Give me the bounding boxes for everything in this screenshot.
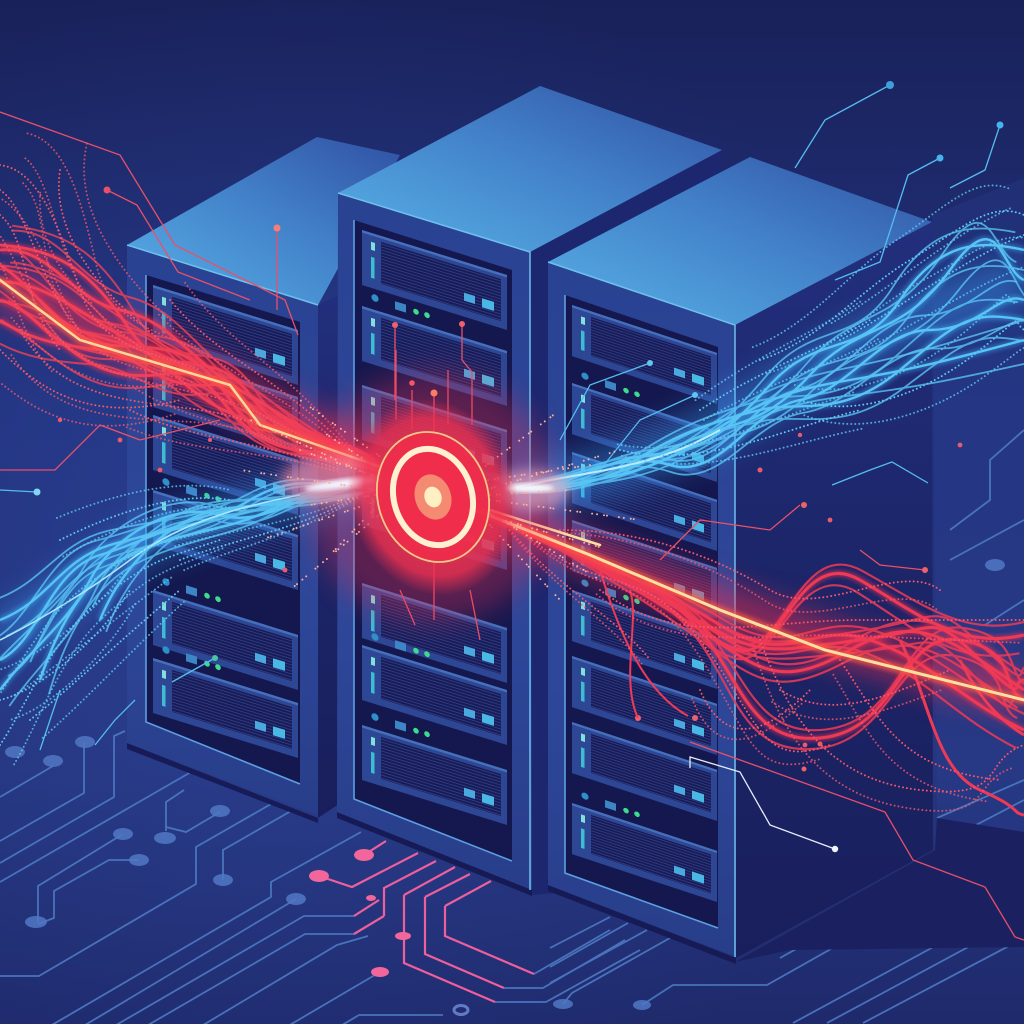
left rack units <box>153 285 298 758</box>
blue data stream: left <box>0 460 384 706</box>
center rack units <box>362 230 507 825</box>
thin line end nodes <box>34 81 1004 852</box>
server rack: left <box>127 137 400 823</box>
circuit board traces: blue <box>0 430 1024 1024</box>
blue particle trails: right <box>605 184 1024 482</box>
red particle trails: left <box>0 133 396 496</box>
blue particle trails: left <box>0 469 374 764</box>
burst particles around target <box>240 400 640 600</box>
circuit nodes: pink <box>309 849 411 977</box>
red data stream glow <box>0 245 1024 738</box>
red particle trails: right <box>498 530 1024 814</box>
blue data stream haze <box>0 280 1024 640</box>
scattered particles <box>58 418 962 747</box>
circuit traces: pink <box>319 841 534 1002</box>
bright orange beam: right <box>478 510 1024 700</box>
red data stream haze <box>0 285 1024 695</box>
red data stream: right <box>487 501 1024 815</box>
red data stream: left <box>0 226 387 490</box>
right rack units <box>572 305 717 902</box>
circuit nodes: blue <box>5 559 1005 1024</box>
bright orange beam: left <box>0 280 378 466</box>
shadow of right server <box>735 818 1024 962</box>
server rack: right <box>548 157 933 964</box>
target glow <box>280 372 570 622</box>
blue data stream: right <box>501 221 1024 514</box>
server rack: center <box>337 86 722 896</box>
target: red disc with rings <box>322 376 544 618</box>
